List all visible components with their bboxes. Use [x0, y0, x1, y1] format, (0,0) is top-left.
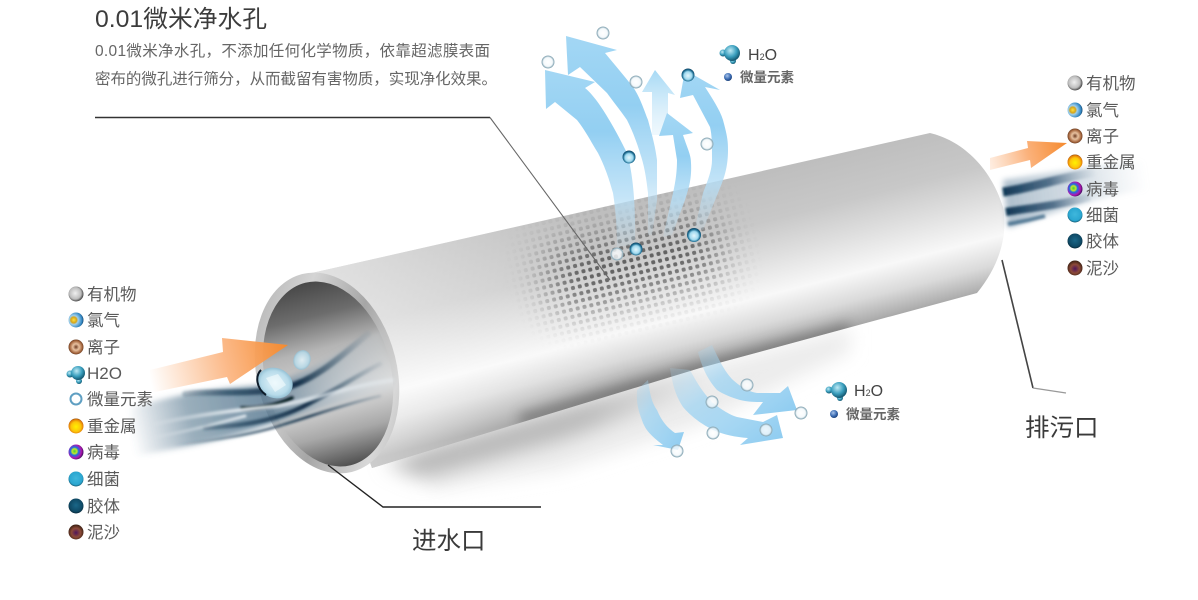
horizontal part [95, 116, 490, 118]
胶体: 胶体 [87, 497, 120, 516]
离子: 离子 [87, 338, 120, 357]
泥沙: 泥沙 [87, 523, 120, 542]
orange outlet arrow [990, 141, 1067, 170]
legend: bottom arrows [826, 382, 900, 422]
diagonal part [490, 118, 610, 280]
trace element dot [724, 73, 732, 81]
H2O [66, 364, 122, 384]
top bubbles [596, 26, 610, 40]
leader line: inlet [328, 465, 541, 507]
细菌 [1068, 206, 1119, 225]
有机物 [1068, 74, 1136, 93]
pipe floor shadow [385, 328, 850, 490]
arrow far left [545, 70, 635, 247]
重金属: 重金属 [1086, 153, 1136, 172]
胶体 [1068, 232, 1120, 251]
泥沙: 泥沙 [1086, 259, 1119, 278]
H2O: H2O [87, 364, 122, 383]
description text [95, 42, 497, 88]
water stream inlet [130, 330, 398, 456]
trace element dot [830, 410, 838, 418]
dark narrow shadow [385, 368, 700, 478]
dark strands [170, 334, 380, 446]
微量元素: 微量元素 [87, 390, 153, 409]
pipe rim [234, 257, 420, 489]
氯气 [68, 311, 120, 330]
氯气: 氯气 [87, 311, 120, 330]
label: outlet: 排污口 [1025, 414, 1098, 442]
有机物: 有机物 [1086, 74, 1136, 93]
有机物: 有机物 [87, 285, 136, 304]
H2O molecule [720, 45, 740, 64]
dark strands [1003, 172, 1095, 224]
H2O text: H2O [748, 47, 777, 64]
病毒: 病毒 [1086, 180, 1119, 199]
氯气 [1068, 101, 1119, 120]
H2O molecule [826, 382, 847, 401]
bottom edge shade [520, 328, 850, 420]
病毒 [1068, 180, 1119, 199]
arrow middle [670, 368, 783, 445]
bottom bubbles [740, 378, 754, 392]
micro-pore dot mesh [521, 193, 748, 337]
pale stream [1003, 160, 1148, 228]
pale part [1033, 388, 1066, 393]
stream body [130, 330, 398, 456]
有机物 [68, 285, 136, 304]
orange inlet arrow [150, 338, 288, 393]
description line two: 密布的微孔进行筛分，从而截留有害物质，实现净化效果。 [95, 70, 497, 88]
leader line: pore [95, 118, 610, 280]
water molecules on arrows [542, 26, 808, 458]
pipe surface shading [314, 193, 854, 468]
arrow tall [566, 36, 657, 235]
胶体: 胶体 [1086, 232, 1120, 251]
trace element text: 微量元素 [846, 406, 900, 422]
泥沙 [68, 523, 120, 542]
upward filtered water arrows [545, 36, 728, 247]
description line one: 0.01微米净水孔，不添加任何化学物质，依靠超滤膜表面 [95, 42, 490, 60]
胶体 [68, 497, 120, 516]
downward waste water arrows [637, 345, 797, 450]
left highlight [314, 224, 577, 468]
large droplet [253, 363, 297, 403]
arrow left [637, 380, 684, 450]
leader line: outlet [1002, 260, 1066, 393]
离子 [1068, 127, 1119, 146]
water stream outlet [1003, 160, 1148, 228]
重金属 [1068, 153, 1136, 172]
离子: 离子 [1086, 127, 1119, 146]
氯气: 氯气 [1086, 101, 1119, 120]
legend: top arrows [720, 45, 794, 85]
病毒: 病毒 [87, 443, 120, 462]
pale wide shadow [420, 328, 850, 490]
dark part [1002, 260, 1033, 388]
泥沙 [1068, 259, 1119, 278]
H2O text: H2O [854, 383, 883, 400]
membrane pipe [234, 130, 1004, 489]
light strands [150, 380, 392, 438]
细菌: 细菌 [87, 470, 120, 489]
重金属: 重金属 [87, 417, 136, 436]
arrow short [659, 113, 693, 237]
small droplet [291, 348, 313, 372]
legend: outlet contaminants [1068, 74, 1136, 278]
pipe body [303, 133, 1004, 468]
离子 [68, 338, 120, 357]
重金属 [68, 417, 136, 436]
heading: 0.01微米净水孔 [95, 6, 267, 33]
细菌 [68, 470, 120, 489]
water droplets [253, 348, 313, 403]
trace element text: 微量元素 [740, 69, 794, 85]
细菌: 细菌 [1086, 206, 1119, 225]
arrow right [680, 70, 728, 230]
arrow right [698, 345, 797, 415]
arrow centre pale [642, 70, 675, 135]
pipe opening [244, 268, 412, 480]
legend: inlet contaminants [66, 285, 153, 542]
label: inlet: 进水口 [412, 527, 486, 555]
病毒 [68, 443, 120, 462]
